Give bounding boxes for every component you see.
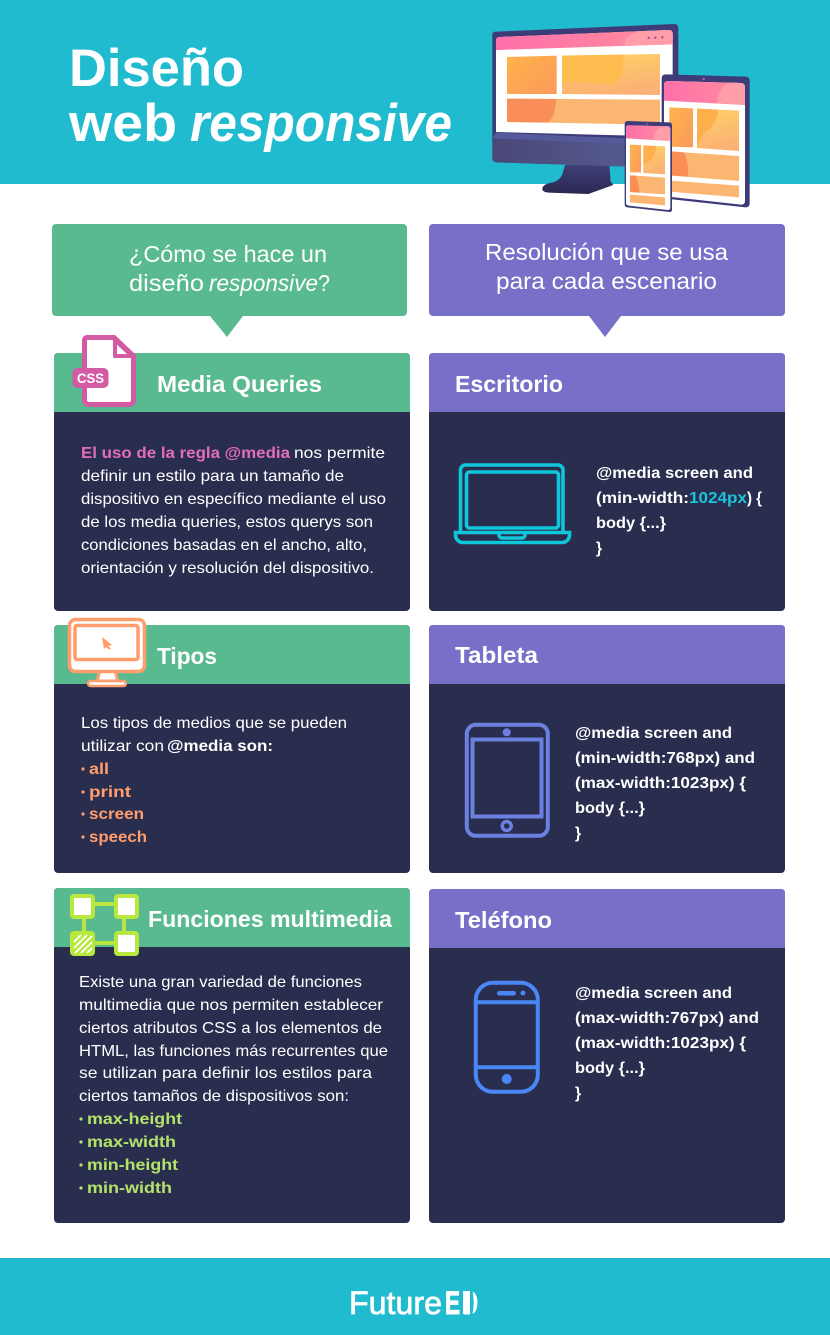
text block: media description: El uso de la regla @media bbox=[81, 445, 290, 462]
text block: funciones list: min-width bbox=[87, 1180, 172, 1197]
text block: tipos list: screen bbox=[89, 806, 144, 823]
text block: tableta code: (min-width:768px) and bbox=[575, 750, 755, 767]
panel: escritorio bbox=[429, 353, 785, 611]
heading: media queries: Media Queries bbox=[157, 371, 322, 397]
panel: tableta bbox=[429, 625, 785, 873]
text block: tableta code: (max-width:1023px) { bbox=[575, 775, 746, 792]
text block: tipos list: @media son: bbox=[167, 738, 273, 755]
text block: tipos list: speech bbox=[89, 829, 147, 846]
icon: monitor bbox=[70, 620, 144, 686]
text block: media description bbox=[81, 445, 386, 577]
text block: tableta code bbox=[575, 725, 755, 842]
text block: funciones list: multimedia que nos permiten establecer bbox=[79, 997, 384, 1014]
text block: funciones list: max-height bbox=[87, 1111, 183, 1128]
text block: media description: definir un estilo para un tamaño de bbox=[81, 468, 344, 485]
text block: funciones list: ciertos tamaños de dispositivos son: bbox=[79, 1088, 349, 1105]
icon: nodes bbox=[72, 896, 137, 954]
text block: telefono code bbox=[575, 985, 759, 1102]
text block: tableta code: } bbox=[575, 825, 581, 842]
text block: funciones list: ciertos atributos CSS a los elementos de bbox=[79, 1020, 382, 1037]
text block: media description: condiciones basadas en el ancho, alto, bbox=[81, 537, 367, 554]
footer band bbox=[0, 1258, 830, 1335]
title bbox=[68, 39, 452, 153]
text block: escritorio code bbox=[596, 465, 762, 557]
heading: escritorio: Escritorio bbox=[455, 371, 563, 397]
icon: css file: CSS bbox=[77, 370, 104, 386]
heading: tipos: Tipos bbox=[157, 643, 217, 669]
text block: escritorio code: } bbox=[596, 540, 602, 557]
icon: css file bbox=[72, 338, 134, 404]
title: Diseño bbox=[69, 39, 244, 98]
text block: tipos list: utilizar con bbox=[81, 738, 164, 755]
callout: resolution bbox=[429, 224, 785, 337]
heading: tableta: Tableta bbox=[455, 642, 538, 668]
heading: telefono: Teléfono bbox=[455, 907, 552, 933]
logo: FutureED: D bbox=[463, 1285, 478, 1321]
text block: escritorio code: ) { bbox=[747, 490, 762, 507]
heading: funciones multimedia: Funciones multimedia bbox=[148, 906, 392, 932]
text block: telefono code: @media screen and bbox=[575, 985, 732, 1002]
text block: funciones list bbox=[79, 974, 388, 1197]
text block: telefono code: (max-width:1023px) { bbox=[575, 1035, 746, 1052]
callout: how bbox=[52, 224, 407, 337]
text block: tableta code: body {...} bbox=[575, 800, 645, 817]
text block: tipos list bbox=[81, 715, 347, 846]
icon: tablet bbox=[467, 725, 548, 836]
text block: funciones list: min-height bbox=[87, 1157, 179, 1174]
panel: media queries bbox=[54, 338, 410, 611]
panel: tipos bbox=[54, 620, 410, 873]
text block: media description: dispositivo en específico mediante el uso bbox=[81, 491, 386, 508]
text block: tipos list: Los tipos de medios que se pueden bbox=[81, 715, 347, 732]
callout: how: ¿Cómo se hace un bbox=[129, 241, 327, 267]
text block: tipos list: all bbox=[89, 761, 109, 778]
text block: escritorio code: 1024px bbox=[689, 490, 747, 507]
logo: FutureED: Future bbox=[349, 1285, 442, 1321]
illustration: responsive devices bbox=[492, 24, 750, 212]
callout: how: ? bbox=[318, 270, 330, 296]
text block: tableta code: @media screen and bbox=[575, 725, 732, 742]
icon: laptop bbox=[456, 465, 570, 542]
title: responsive bbox=[190, 94, 452, 153]
callout: how: responsive bbox=[209, 270, 318, 296]
text block: telefono code: body {...} bbox=[575, 1060, 645, 1077]
text block: funciones list: HTML, las funciones más recurrentes que bbox=[79, 1043, 388, 1060]
title: web bbox=[68, 94, 177, 153]
text block: escritorio code: @media screen and bbox=[596, 465, 753, 482]
callout: resolution: Resolución que se usa bbox=[485, 239, 728, 265]
text block: escritorio code: (min-width: bbox=[596, 490, 689, 507]
panel: telefono bbox=[429, 889, 785, 1223]
callout: resolution: para cada escenario bbox=[496, 268, 717, 294]
text block: funciones list: se utilizan para definir los estilos para bbox=[79, 1065, 372, 1082]
text block: media description: nos permite bbox=[294, 445, 385, 462]
panel: funciones multimedia bbox=[54, 888, 410, 1223]
text block: media description: de los media queries, estos querys son bbox=[81, 514, 373, 531]
callout: how: diseño bbox=[129, 270, 204, 296]
icon: phone bbox=[476, 983, 538, 1092]
logo: FutureED: E bbox=[445, 1285, 460, 1321]
text block: escritorio code: body {...} bbox=[596, 515, 666, 532]
text block: tipos list: print bbox=[89, 784, 132, 801]
text block: media description: orientación y resolución del dispositivo. bbox=[81, 560, 374, 577]
text block: telefono code: (max-width:767px) and bbox=[575, 1010, 759, 1027]
text block: telefono code: } bbox=[575, 1085, 581, 1102]
text block: funciones list: max-width bbox=[87, 1134, 176, 1151]
text block: funciones list: Existe una gran variedad de funciones bbox=[79, 974, 362, 991]
header band bbox=[0, 0, 830, 184]
